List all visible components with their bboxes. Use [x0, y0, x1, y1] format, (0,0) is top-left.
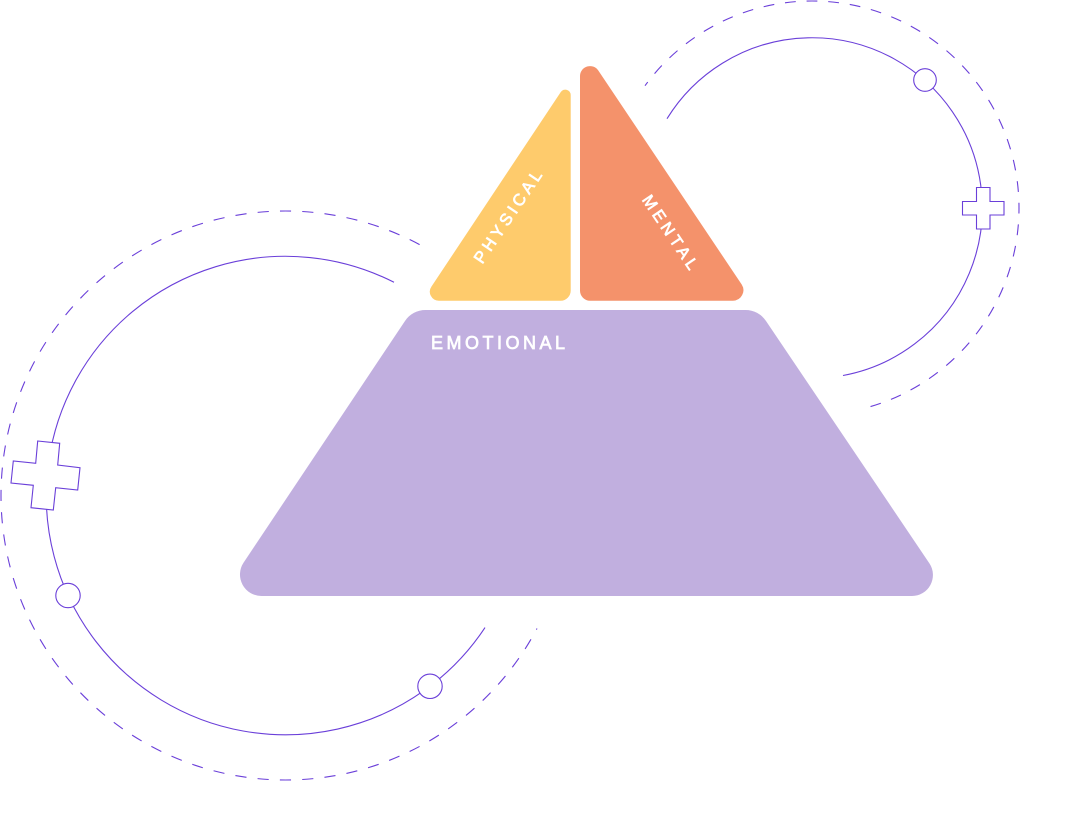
left dashed arc	[1, 211, 537, 780]
icon: right circle node	[914, 69, 936, 91]
label: physical: PHYSICAL	[471, 167, 546, 267]
right decorative rings	[645, 1, 1019, 407]
left inner arc	[46, 256, 485, 735]
right dashed arc	[645, 1, 1019, 407]
icon: left circle node lower-left	[56, 583, 80, 608]
label: mental: MENTAL	[638, 192, 701, 273]
panel: emotional	[240, 310, 933, 596]
icon: left plus	[11, 441, 80, 510]
label: emotional: EMOTIONAL	[431, 333, 565, 353]
icon: right plus	[962, 188, 1004, 229]
panel: mental	[580, 66, 743, 301]
pyramid	[240, 66, 933, 596]
right inner arc	[667, 38, 982, 376]
panel: physical	[430, 90, 571, 301]
left decorative rings	[1, 211, 537, 780]
icon: left circle node bottom	[418, 674, 442, 698]
